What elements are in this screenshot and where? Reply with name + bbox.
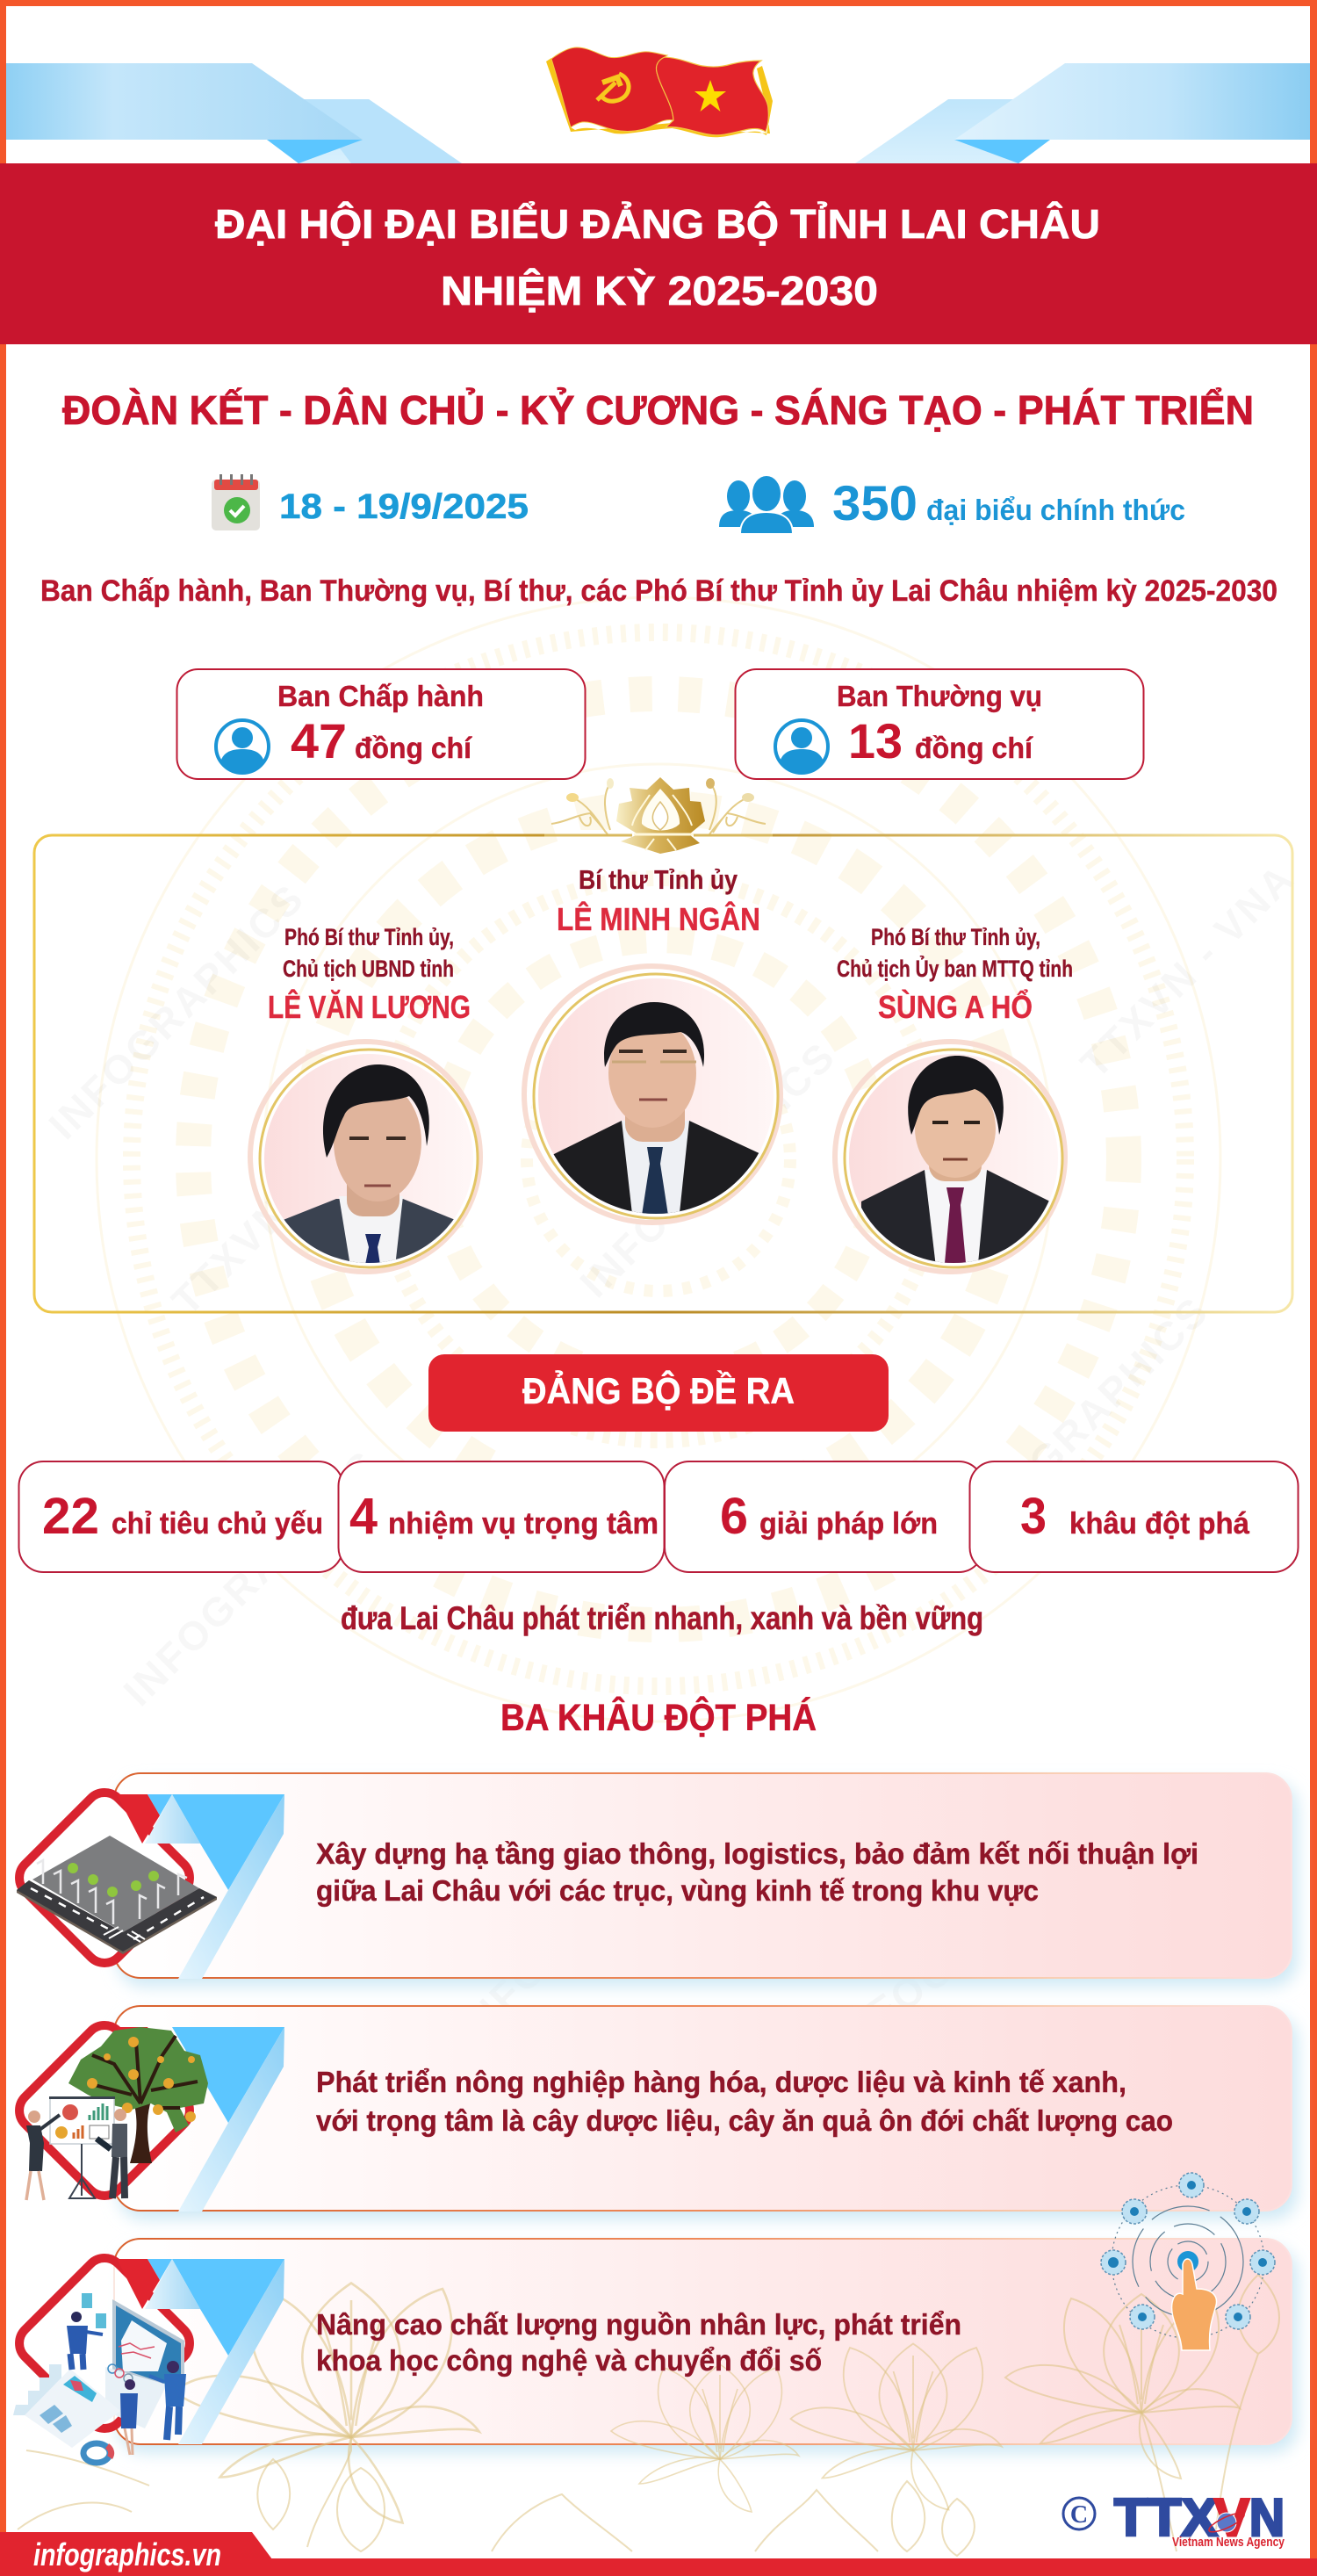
slogan: ĐOÀN KẾT - DÂN CHỦ - KỶ CƯƠNG - SÁNG TẠO - PHÁT TRIỂN xyxy=(62,387,1254,433)
monitor xyxy=(112,2299,184,2393)
left leader caption: Phó Bí thư Tỉnh ủy, xyxy=(284,924,454,950)
ribbon right xyxy=(855,63,1310,163)
watermarks: INFOGRAPHICS xyxy=(944,1287,1218,1561)
floating icons xyxy=(82,2293,92,2308)
center leader caption: LÊ MINH NGÂN xyxy=(557,900,760,937)
panel: Ban Thường vụ xyxy=(736,669,1143,779)
watermarks xyxy=(40,855,1304,2062)
watermarks: INFOGRAPHICS xyxy=(571,1032,845,1306)
icon: person xyxy=(216,720,269,773)
text: Xây dựng hạ tầng giao thông, logistics, bảo đảm kết nối thuận lợi xyxy=(316,1837,1198,1870)
portrait: Lê Văn Lương xyxy=(250,1042,483,1282)
right leader caption: SÙNG A HỔ xyxy=(878,987,1033,1025)
icon: digital touch network xyxy=(1101,2173,1275,2350)
header ribbons xyxy=(6,63,1310,163)
panel: breakthrough 2 xyxy=(11,2006,1298,2219)
tagline: Vietnam News Agency xyxy=(1172,2535,1285,2550)
target: 6: giải pháp lớn xyxy=(759,1507,938,1541)
bars xyxy=(13,2364,61,2415)
ribbon left xyxy=(6,63,462,163)
copyright mark: C xyxy=(1070,2501,1088,2529)
target: 22 xyxy=(19,1461,342,1572)
watermarks: TTXVN - VNA xyxy=(1071,855,1304,1086)
donut xyxy=(83,2443,110,2463)
event date: 18 - 19/9/2025 xyxy=(279,487,529,526)
goal statement: đưa Lai Châu phát triển nhanh, xanh và bền vững xyxy=(341,1600,983,1636)
left leader caption xyxy=(268,924,471,1025)
title line 2: NHIỆM KỲ 2025-2030 xyxy=(441,268,878,314)
target: 6: 6 xyxy=(720,1488,748,1545)
portrait: Sùng A Hồ xyxy=(835,1042,1071,1282)
title band xyxy=(0,163,1317,344)
target: 6 xyxy=(665,1461,983,1572)
panel: leaders xyxy=(34,777,1292,1312)
text xyxy=(316,2066,1173,2137)
icon: star xyxy=(694,80,726,112)
icon: data analysts illustration xyxy=(13,2293,186,2463)
target: 3 xyxy=(969,1461,1298,1572)
icon: party and national flags xyxy=(546,47,773,137)
right leader caption xyxy=(837,924,1073,1025)
left leader caption: LÊ VĂN LƯƠNG xyxy=(268,988,471,1025)
panel: breakthrough 3 xyxy=(11,2239,1298,2556)
panel: Ban Chấp hành: đồng chí xyxy=(355,732,473,764)
right leader caption: Phó Bí thư Tỉnh ủy, xyxy=(871,924,1040,950)
count: 47 xyxy=(291,713,347,768)
wordmark: TTX xyxy=(1114,2488,1218,2547)
icon: red diamond frame xyxy=(11,2017,284,2212)
panel: Ban Chấp hành xyxy=(177,669,585,779)
target: 3: khâu đột phá xyxy=(1069,1507,1249,1541)
watermarks: INFOGRAPHICS xyxy=(448,1779,722,2053)
wordmark: V xyxy=(1214,2488,1249,2547)
icon: person xyxy=(775,720,828,773)
analyst woman xyxy=(120,2379,138,2455)
panel: breakthrough 1 xyxy=(11,1773,1298,1987)
right leader caption: Chủ tịch Ủy ban MTTQ tỉnh xyxy=(837,954,1073,982)
delegates count: 350 xyxy=(832,475,918,530)
wordmark: N xyxy=(1249,2488,1285,2547)
text: Nâng cao chất lượng nguồn nhân lực, phát triển xyxy=(316,2308,961,2341)
presenter woman xyxy=(26,2111,60,2200)
background lotus line art xyxy=(18,2275,1279,2556)
target: 4: nhiệm vụ trọng tâm xyxy=(388,1507,658,1541)
icon: golden lotus xyxy=(544,777,773,854)
copyright mark xyxy=(1063,2498,1095,2529)
count: 13 xyxy=(848,713,903,768)
text: với trọng tâm là cây dược liệu, cây ăn quả ôn đới chất lượng cao xyxy=(316,2104,1173,2137)
title line 1: ĐẠI HỘI ĐẠI BIỂU ĐẢNG BỘ TỈNH LAI CHÂU xyxy=(215,201,1100,247)
text: Phát triển nông nghiệp hàng hóa, dược liệu và kinh tế xanh, xyxy=(316,2066,1126,2098)
icon: red diamond frame xyxy=(11,2250,284,2444)
watermarks: INFOGRAPHICS xyxy=(40,874,313,1148)
banner: Đảng bộ đề ra: ĐẢNG BỘ ĐỀ RA xyxy=(522,1369,795,1411)
analyst standing xyxy=(149,2361,186,2440)
heading: Ba khâu đột phá: BA KHÂU ĐỘT PHÁ xyxy=(500,1696,817,1739)
icon: tree with presenters xyxy=(26,2027,208,2200)
delegates count xyxy=(832,475,1185,530)
delegates count: đại biểu chính thức xyxy=(926,494,1185,526)
target: 3: 3 xyxy=(1020,1488,1047,1545)
watermarks: INFOGRAPHICS xyxy=(114,1440,388,1714)
watermarks: TTXVN xyxy=(162,1188,298,1324)
target: 4 xyxy=(339,1461,664,1572)
icon: red diamond frame xyxy=(11,1785,284,1979)
text: khoa học công nghệ và chuyển đổi số xyxy=(316,2344,822,2377)
portrait: Lê Minh Ngân xyxy=(524,966,790,1230)
presenter man xyxy=(97,2109,127,2198)
footer xyxy=(0,2532,1317,2576)
icon: delegates xyxy=(719,475,814,534)
background drum pattern xyxy=(97,597,1220,1721)
icon: road illustration xyxy=(17,1836,217,1954)
target: 22: 22 xyxy=(42,1488,99,1545)
paper xyxy=(25,2369,120,2448)
site url: infographics.vn xyxy=(33,2536,221,2572)
target: 22: chỉ tiêu chủ yếu xyxy=(112,1507,323,1541)
text xyxy=(316,1837,1198,1907)
logo: TTXVN xyxy=(1063,2488,1285,2550)
panel: four targets xyxy=(19,1461,1298,1572)
center leader caption xyxy=(557,864,760,937)
text xyxy=(316,2308,961,2377)
icon: globe xyxy=(1207,2509,1246,2536)
panel: Ban Thường vụ: đồng chí xyxy=(915,732,1034,764)
analyst man xyxy=(67,2312,103,2370)
target: 4: 4 xyxy=(349,1488,378,1545)
text: giữa Lai Châu với các trục, vùng kinh tế trong khu vực xyxy=(316,1874,1039,1907)
icon: hammer and sickle xyxy=(597,74,629,101)
label: Ban Thường vụ xyxy=(837,680,1042,712)
wordmark xyxy=(1114,2488,1285,2547)
label: Ban Chấp hành xyxy=(277,680,484,712)
watermarks: INFOGRAPHICS xyxy=(822,1829,1127,2062)
left leader caption: Chủ tịch UBND tỉnh xyxy=(283,956,454,982)
icon: calendar xyxy=(212,474,260,530)
banner: Đảng bộ đề ra xyxy=(428,1354,889,1432)
center leader caption: Bí thư Tỉnh ủy xyxy=(579,864,738,895)
